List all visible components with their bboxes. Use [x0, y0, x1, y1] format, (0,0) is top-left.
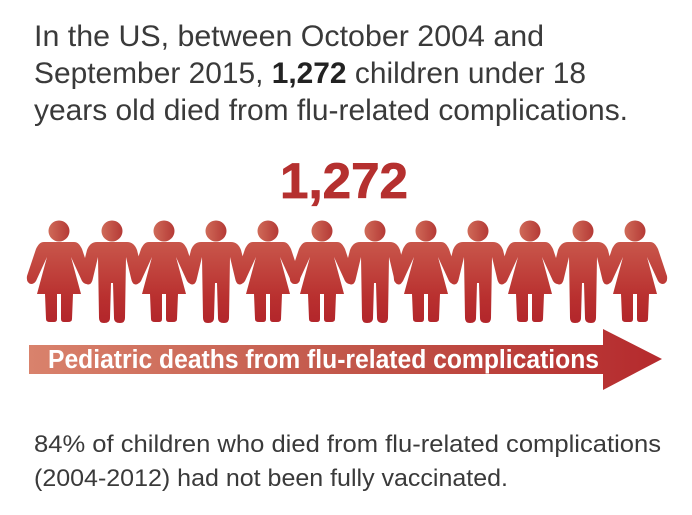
arrow shape — [29, 329, 662, 390]
person 11: male — [554, 220, 612, 323]
person 4: male — [187, 220, 245, 323]
vaccination note — [34, 431, 661, 492]
person 2: male — [83, 220, 141, 323]
intro text: years old died from flu-related complications. — [34, 94, 628, 127]
row of people holding hands — [27, 220, 667, 323]
person 3: female — [132, 220, 196, 322]
intro text: In the US, between October 2004 and — [34, 20, 544, 53]
big number: 1,272 — [280, 153, 408, 209]
intro text: September 2015, 1,272 children under 18 — [34, 57, 586, 90]
intro text — [34, 20, 628, 127]
person 6: female — [290, 220, 354, 322]
person 9: male — [449, 220, 507, 323]
person 8: female — [394, 220, 458, 322]
vaccination note: 84% of children who died from flu-related complications — [34, 431, 661, 458]
arrow label: Pediatric deaths from flu-related complications — [48, 346, 599, 374]
arrow banner — [29, 329, 662, 390]
vaccination note: (2004-2012) had not been fully vaccinated. — [34, 465, 508, 492]
person 12: female — [603, 220, 667, 322]
person 1: female — [27, 220, 91, 322]
person 5: female — [236, 220, 300, 322]
person 10: female — [498, 220, 562, 322]
person 7: male — [346, 220, 404, 323]
